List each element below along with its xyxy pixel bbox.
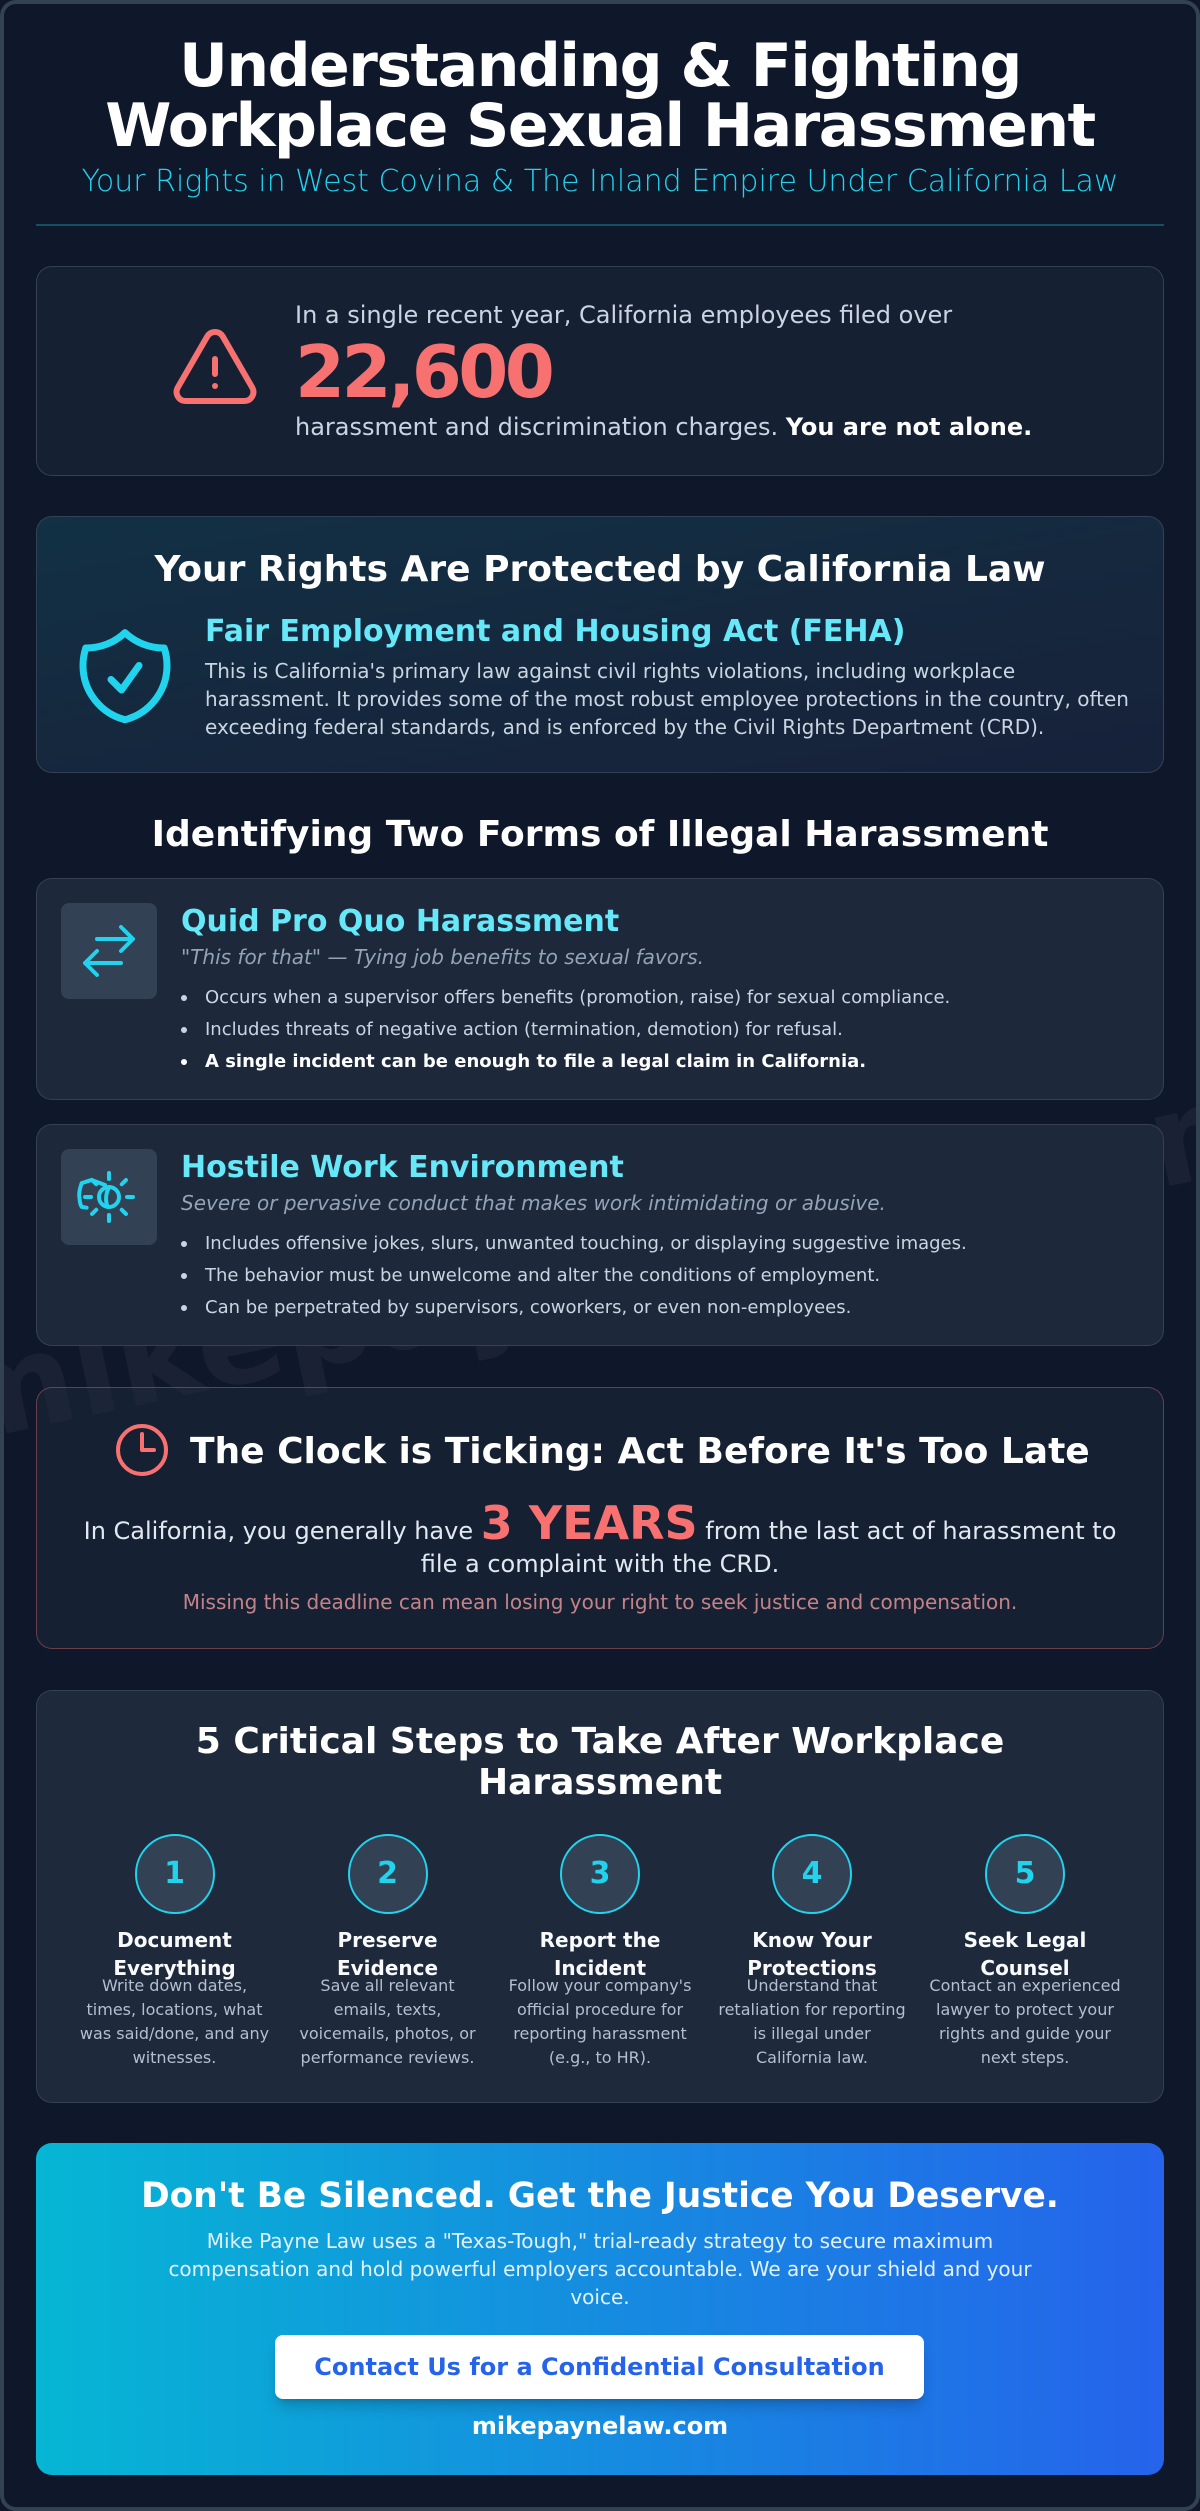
deadline heading: The Clock is Ticking: Act Before It's Too Late — [190, 1431, 1090, 1472]
step 5 text: next steps. — [981, 2048, 1069, 2067]
step 2 text — [299, 1976, 476, 2067]
step 4 text — [718, 1976, 906, 2067]
step 5 title: Seek Legal — [964, 1928, 1086, 1952]
icon: clock — [116, 1424, 168, 1476]
step 4 — [718, 1834, 906, 2067]
card title: Quid Pro Quo Harassment — [181, 904, 619, 939]
panel: steps — [36, 1690, 1164, 2103]
step 2 text: Save all relevant — [320, 1976, 455, 1995]
header — [36, 31, 1164, 226]
card subtitle: "This for that" — Tying job benefits to sexual favors. — [181, 945, 704, 969]
statistic caption: harassment and discrimination charges. You are not alone. — [295, 413, 1032, 441]
step 3 text: official procedure for — [517, 2000, 683, 2019]
title — [105, 31, 1095, 161]
icon: sun and face — [61, 1149, 157, 1245]
deadline statement: In California, you generally have 3 YEARS from the last act of harassment to — [84, 1496, 1116, 1550]
step 4 text: is illegal under — [753, 2024, 871, 2043]
number 2 — [348, 1834, 428, 1914]
step 4 title: Protections — [747, 1956, 877, 1980]
step 1 title — [113, 1928, 236, 1980]
panel: quid pro quo — [36, 878, 1164, 1100]
number 4 — [772, 1834, 852, 1914]
card title: Hostile Work Environment — [181, 1150, 624, 1185]
title: Workplace Sexual Harassment — [105, 91, 1095, 161]
statistic intro: In a single recent year, California employees filed over — [295, 301, 952, 329]
bullet: Includes threats of negative action (termination, demotion) for refusal. — [205, 1019, 843, 1040]
icon: shield — [80, 629, 170, 724]
FEHA title: Fair Employment and Housing Act (FEHA) — [205, 614, 905, 649]
step 5 text: lawyer to protect your — [936, 2000, 1114, 2019]
step 3 text: reporting harassment — [513, 2024, 687, 2043]
FEHA description: This is California's primary law against civil rights violations, including workplace — [205, 659, 1015, 683]
deadline statement continued: file a complaint with the CRD. — [421, 1550, 779, 1578]
panel: call to action — [36, 2143, 1164, 2475]
step 4 text: Understand that — [747, 1976, 877, 1995]
number 3: 3 — [590, 1856, 610, 1891]
icon: arrows — [61, 903, 157, 999]
step 2 title: Preserve — [337, 1928, 438, 1952]
card subtitle: Severe or pervasive conduct that makes work intimidating or abusive. — [181, 1191, 886, 1215]
steps heading — [196, 1721, 1004, 1802]
step 5 text — [929, 1976, 1121, 2067]
bullet: A single incident can be enough to file a legal claim in California. — [205, 1051, 866, 1072]
CTA heading: Don't Be Silenced. Get the Justice You Deserve. — [141, 2176, 1059, 2216]
step 4 title: Know Your — [752, 1928, 872, 1952]
panel: California law — [36, 516, 1164, 773]
number 1 — [134, 1834, 214, 1914]
step 1 — [80, 1834, 269, 2067]
step 2 text: emails, texts, — [334, 2000, 441, 2019]
step 5 title — [964, 1928, 1086, 1980]
CTA button: Contact Us for a Confidential Consultation — [314, 2353, 885, 2381]
heading: Your Rights Are Protected by California Law — [155, 549, 1045, 590]
step 1 text: witnesses. — [133, 2048, 216, 2067]
step 1 text: was said/done, and any — [80, 2024, 269, 2043]
step 3 — [509, 1834, 691, 2067]
statistic number: 22,600 — [295, 330, 551, 414]
step 1 text: times, locations, what — [87, 2000, 262, 2019]
FEHA description: harassment. It provides some of the most robust employee protections in the country, often — [205, 687, 1129, 711]
step 3 text — [509, 1976, 691, 2067]
number 3 — [560, 1834, 640, 1914]
header rule — [36, 224, 1164, 226]
step 3 text: Follow your company's — [509, 1976, 691, 1995]
steps heading: Harassment — [478, 1762, 722, 1802]
step 3 title — [540, 1928, 660, 1980]
deadline warning: Missing this deadline can mean losing your right to seek justice and compensation. — [183, 1590, 1017, 1614]
section heading: Identifying Two Forms of Illegal Harassment — [152, 814, 1048, 855]
step 5 text: rights and guide your — [939, 2024, 1111, 2043]
panel: deadline — [36, 1387, 1164, 1649]
step 3 title: Incident — [554, 1956, 646, 1980]
step 3 title: Report the — [540, 1928, 660, 1952]
step 3 text: (e.g., to HR). — [549, 2048, 651, 2067]
bullet: The behavior must be unwelcome and alter the conditions of employment. — [205, 1265, 880, 1286]
CTA text: voice. — [570, 2285, 630, 2309]
step 4 text: California law. — [756, 2048, 868, 2067]
CTA text — [168, 2229, 1032, 2309]
step 5 text: Contact an experienced — [929, 1976, 1121, 1995]
step 1 title: Document — [117, 1928, 232, 1952]
step 2 text: voicemails, photos, or — [299, 2024, 476, 2043]
step 4 title — [747, 1928, 877, 1980]
step 2 title — [337, 1928, 438, 1980]
step 2 title: Evidence — [337, 1956, 438, 1980]
CTA text: Mike Payne Law uses a "Texas-Tough," trial-ready strategy to secure maximum — [207, 2229, 993, 2253]
CTA button — [275, 2335, 924, 2399]
steps heading: 5 Critical Steps to Take After Workplace — [196, 1721, 1004, 1762]
FEHA description — [204, 659, 1129, 739]
number 1: 1 — [164, 1856, 185, 1891]
step 1 text — [80, 1976, 269, 2067]
number 2: 2 — [377, 1856, 398, 1891]
icon: warning triangle — [174, 329, 256, 404]
step 5 — [929, 1834, 1121, 2067]
number 5: 5 — [1015, 1856, 1035, 1891]
panel: statistic — [36, 266, 1164, 476]
step 2 text: performance reviews. — [301, 2048, 474, 2067]
website: mikepaynelaw.com — [472, 2412, 728, 2440]
number 4: 4 — [802, 1856, 822, 1891]
bullet: Can be perpetrated by supervisors, coworkers, or even non-employees. — [205, 1297, 851, 1318]
bullet: Includes offensive jokes, slurs, unwanted touching, or displaying suggestive images. — [205, 1233, 967, 1254]
bullet: Occurs when a supervisor offers benefits (promotion, raise) for sexual compliance. — [205, 987, 950, 1008]
FEHA description: exceeding federal standards, and is enforced by the Civil Rights Department (CRD). — [205, 715, 1044, 739]
step 1 title: Everything — [113, 1956, 236, 1980]
subtitle: Your Rights in West Covina & The Inland Empire Under California Law — [82, 164, 1118, 199]
CTA text: compensation and hold powerful employers accountable. We are your shield and your — [168, 2257, 1032, 2281]
step 1 text: Write down dates, — [102, 1976, 247, 1995]
title: Understanding & Fighting — [179, 31, 1021, 101]
step 2 — [299, 1834, 476, 2067]
panel: hostile work environment — [36, 1124, 1164, 1346]
step 5 title: Counsel — [980, 1956, 1070, 1980]
number 5 — [985, 1834, 1065, 1914]
step 4 text: retaliation for reporting — [718, 2000, 906, 2019]
